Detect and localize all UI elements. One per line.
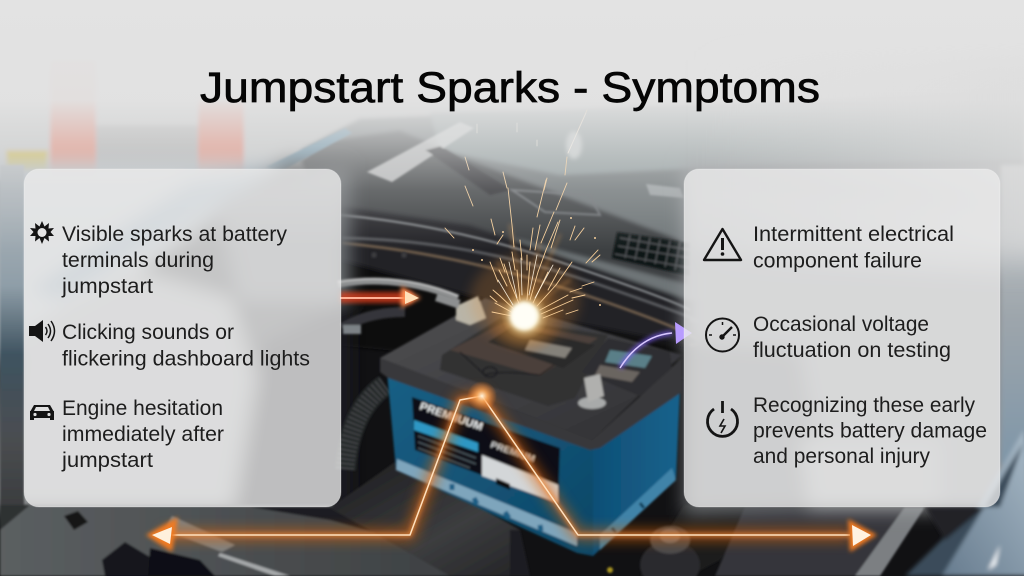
item: engine hesitation: immediately after [62,423,224,446]
icon: spark burst [30,221,54,244]
corrugated hose [345,385,385,470]
left panel underlay, heavily blurred [0,160,350,510]
windscreen and cowl [300,90,1024,300]
item: recognizing early [708,394,993,468]
sparks erupting from battery terminal [445,110,601,356]
lower left plastic panel [0,505,480,576]
lower right parts [640,505,760,576]
arrowhead: right [848,519,877,552]
terminals [435,292,606,409]
item: recognizing early: prevents battery damage [753,420,987,442]
icon: battery warning power symbol [708,401,738,436]
battery label [412,397,560,504]
item: clicking sounds [29,320,310,370]
item: recognizing early: and personal injury [753,445,930,468]
icon: warning triangle [704,229,741,260]
icon: gauge [706,318,739,352]
panel: right symptoms [684,169,1000,507]
arrow: orange polyline to the left and right [146,381,877,552]
raised centre cover [440,318,608,406]
battery front face [387,372,593,556]
item: intermittent failure: Intermittent electrical [753,223,954,246]
item: voltage fluctuation: Occasional voltage [753,313,929,336]
item: visible sparks [30,221,293,298]
battery lid [380,358,682,450]
arrowhead: left [146,517,178,552]
item: visible sparks: Visible sparks at battery [62,223,287,246]
icon: car [30,405,54,420]
arrow: purple, pointing at right panel [620,322,692,368]
panel: left symptoms [24,169,341,507]
fog overlay from top [0,0,1024,260]
battery side face [593,385,680,556]
item: intermittent failure [704,223,960,272]
battery label: PREMIIUUM [418,400,484,433]
workshop backdrop [0,0,1024,180]
icon: speaker [29,320,54,342]
right fender [1001,165,1024,465]
item: visible sparks: jumpstart [61,275,153,298]
arrow: red, pointing at battery [340,286,421,308]
right panel underlay, heavily blurred [684,160,1024,515]
item: engine hesitation: Engine hesitation [62,397,223,420]
item: visible sparks: terminals during [62,249,214,272]
title: Jumpstart Sparks - Symptoms [200,64,820,112]
item: engine hesitation [30,397,230,472]
right vent cap with label [582,338,672,396]
left strip [0,165,24,510]
hoses and cable near the red arrow [338,281,458,298]
item: clicking sounds: flickering dashboard lights [62,348,310,370]
cowl vent grille [612,232,690,276]
battery label: PREMIUM [489,439,536,464]
battery rim strips [396,459,676,550]
item: voltage fluctuation: fluctuation on testing [753,339,951,362]
item: engine hesitation: jumpstart [61,449,153,472]
item: voltage fluctuation [706,313,951,362]
item: clicking sounds: Clicking sounds or [62,321,234,344]
item: intermittent failure: component failure [753,250,922,272]
item: recognizing early: Recognizing these early [753,394,975,417]
intake cover under battery [330,462,530,576]
battery [380,292,682,556]
